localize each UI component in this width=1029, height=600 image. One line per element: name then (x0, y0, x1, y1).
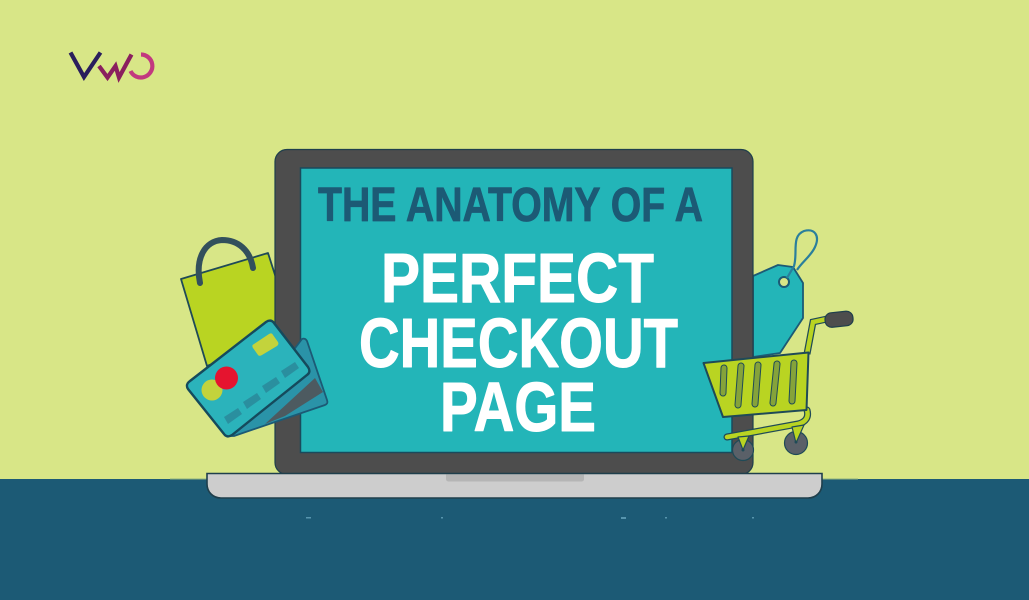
heading: perfect checkout page (359, 239, 678, 446)
heading: perfect checkout page: PAGE (440, 368, 596, 446)
VWO logo (70, 52, 152, 78)
laptop (207, 150, 822, 498)
front card (187, 321, 309, 436)
card logo (202, 380, 222, 400)
laptop screen (300, 168, 732, 452)
dark floor band (0, 479, 1029, 600)
shopping cart icon (704, 311, 854, 460)
wheel hubs (742, 448, 744, 452)
laptop lid (275, 150, 753, 474)
shopping bag icon (181, 240, 276, 366)
title line: the anatomy of a: THE ANATOMY OF A (318, 179, 703, 232)
trackpad notch (446, 474, 584, 482)
cart grip (824, 311, 854, 328)
basket slots (723, 363, 794, 405)
card number blocks (224, 362, 299, 424)
laptop base (207, 474, 822, 498)
cart handle (807, 319, 827, 354)
heading: perfect checkout page: PERFECT (381, 239, 654, 317)
back cards (228, 339, 327, 436)
cart basket (704, 352, 808, 417)
cart wheels (732, 440, 754, 460)
tag icon (753, 230, 817, 357)
faint specks on the floor (306, 517, 754, 519)
credit cards icon (187, 321, 327, 436)
cart frame (727, 410, 808, 437)
heading: perfect checkout page: CHECKOUT (359, 304, 678, 382)
card chip (252, 333, 278, 356)
